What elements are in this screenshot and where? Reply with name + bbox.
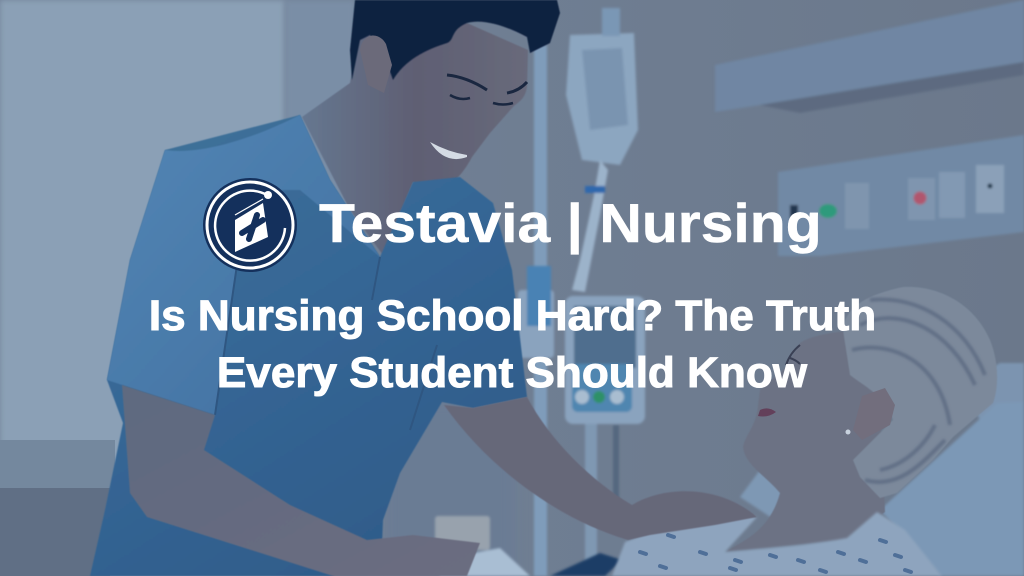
patient gown (612, 510, 942, 576)
nurse forearm right (444, 397, 757, 540)
nurse hair (350, 0, 560, 80)
nurse sleeve (107, 115, 380, 415)
headline: Is Nursing School Hard? The Truth (149, 292, 876, 340)
nurse scrubs (90, 115, 527, 576)
logo: circular emblem with book and cross (203, 178, 297, 272)
patient face and neck (725, 330, 885, 552)
nurse eyes and smile (447, 75, 527, 93)
nurse (90, 0, 757, 576)
logo wordmark: Testavia | Nursing (319, 192, 822, 254)
nurse ear (360, 35, 392, 93)
infusion pump (518, 266, 645, 570)
headline: Every Student Should Know (217, 349, 807, 397)
wall shelf (715, 0, 1024, 113)
nurse neck and face (302, 23, 528, 255)
patient bed and pillow (435, 363, 1024, 576)
patient hair (843, 287, 997, 498)
wall panel with outlets (778, 135, 1024, 256)
patient eye, mouth and earring (786, 345, 800, 365)
IV pole and bag (534, 8, 638, 576)
patient ear (853, 388, 895, 440)
headline (149, 292, 876, 397)
patient (612, 287, 997, 576)
nurse forearm left (122, 385, 480, 576)
